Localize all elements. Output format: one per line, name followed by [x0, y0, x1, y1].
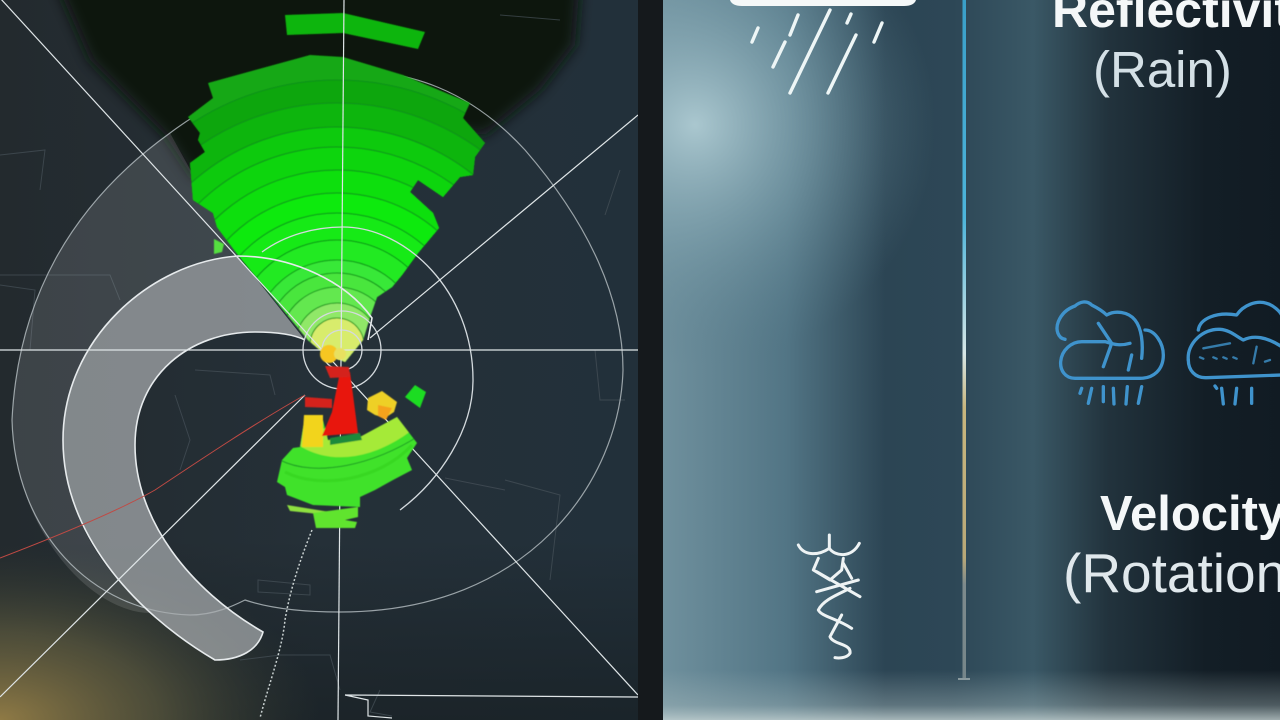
outer range ring	[12, 70, 623, 615]
orange block	[367, 391, 397, 418]
county map lines	[0, 15, 625, 716]
icon: tornado glyph	[798, 535, 860, 658]
panel: right explainer	[663, 0, 1280, 720]
dark notch	[330, 433, 362, 445]
dotted path line	[260, 530, 312, 718]
icon: rain cloud	[730, 0, 916, 93]
green square	[405, 385, 426, 408]
divider	[638, 0, 663, 720]
red triangle	[322, 372, 358, 436]
vertical divider line	[958, 0, 970, 680]
heading: Velocity: Velocity	[1100, 487, 1280, 541]
range rings	[262, 227, 473, 510]
yellow block	[302, 415, 323, 447]
icon: storm cloud outline	[1188, 302, 1280, 404]
dark storm shadow	[55, 0, 580, 180]
grey spiral band	[63, 256, 305, 660]
centre yellow core	[320, 345, 338, 363]
crosshair lines	[0, 0, 638, 720]
icon: rain cloud outline	[1057, 302, 1163, 404]
label: Rain: (Rain)	[1093, 41, 1232, 98]
small green speck	[214, 239, 224, 254]
lower velocity echoes	[277, 345, 426, 528]
outer range ring band fill	[12, 133, 238, 613]
radar fan: green reflectivity echoes	[188, 12, 486, 363]
low strips	[287, 505, 330, 515]
red trace line	[0, 395, 305, 558]
top echo strip	[285, 13, 425, 49]
panel: radar map	[0, 0, 653, 720]
